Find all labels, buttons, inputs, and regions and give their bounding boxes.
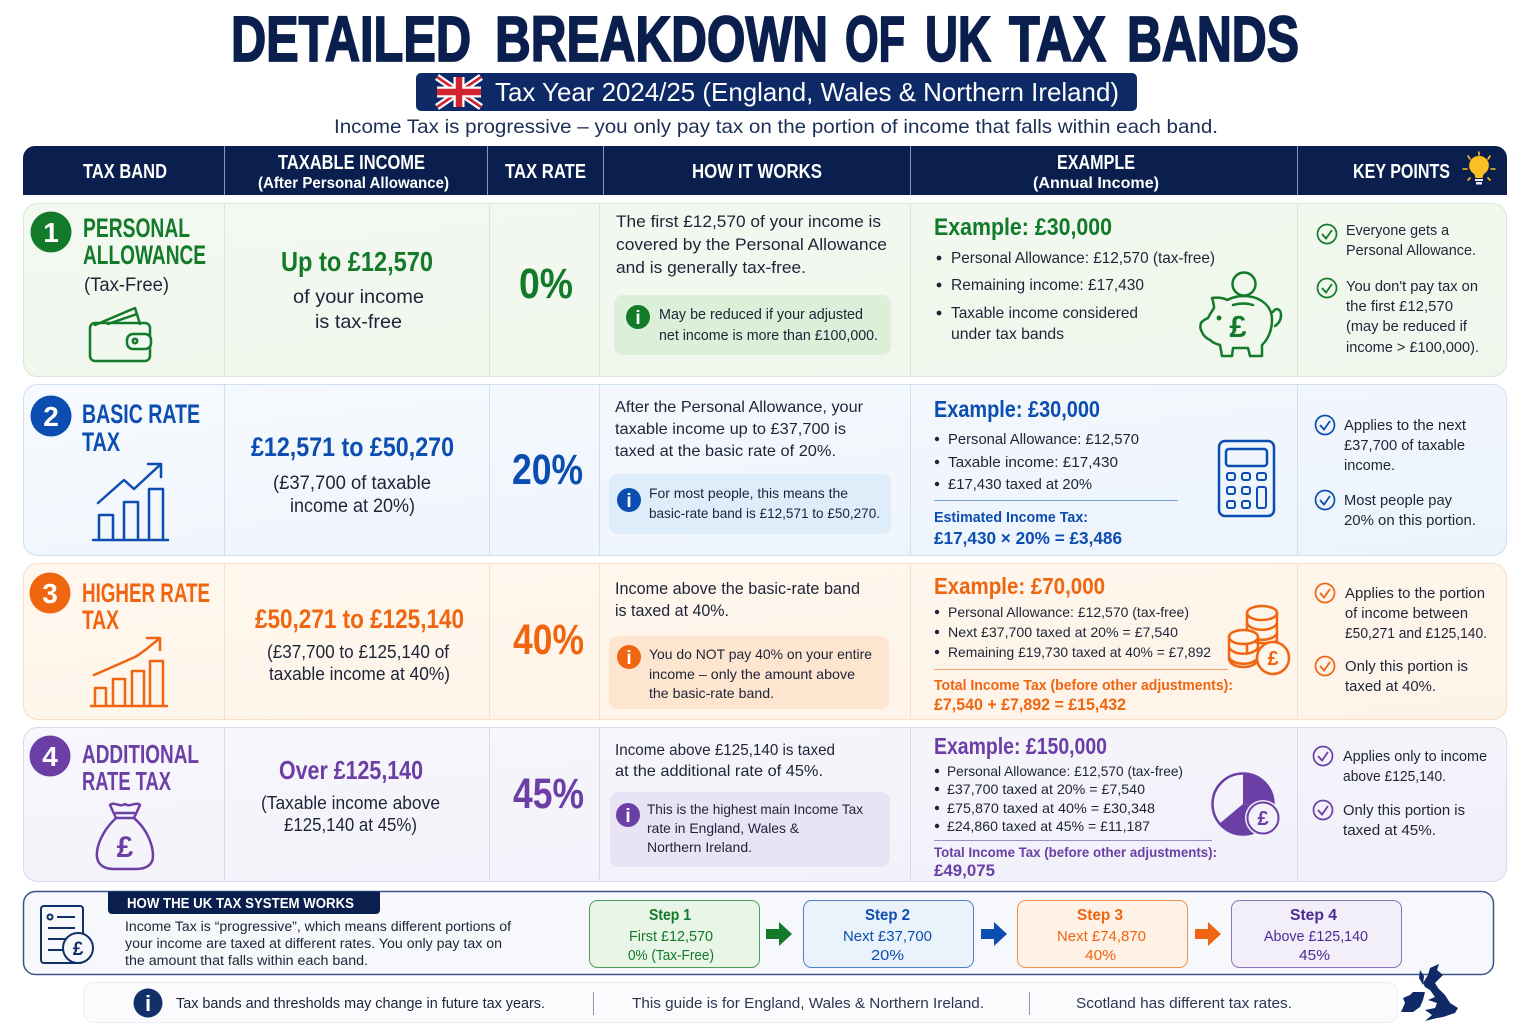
- icon: union jack flag: [437, 77, 481, 107]
- step 3: Next £74,870: [1057, 929, 1146, 945]
- example: Example: £70,000: [934, 573, 1105, 599]
- taxable income: income at 20%): [290, 496, 415, 517]
- how it works: The first £12,570 of your income is: [616, 212, 881, 231]
- step 3: 40%: [1085, 948, 1116, 964]
- header: taxable income: (After Personal Allowance): [258, 175, 449, 192]
- example: Remaining £19,730 taxed at 40% = £7,892: [948, 644, 1211, 660]
- key points: £50,271 and £125,140.: [1345, 626, 1487, 642]
- title: BANDS: [1127, 3, 1299, 75]
- icon: wallet: [90, 308, 151, 361]
- key points: Only this portion is: [1343, 803, 1465, 819]
- example: Taxable income: £17,430: [948, 454, 1118, 471]
- note 2: This guide is for England, Wales & Northern Ireland.: [632, 996, 984, 1012]
- tax rate: 20%: [512, 446, 583, 494]
- tax rate: 40%: [513, 616, 584, 664]
- title: BREAKDOWN: [495, 3, 828, 75]
- icon: rising bar chart: [93, 464, 168, 540]
- example: Personal Allowance: £12,570 (tax-free): [948, 604, 1189, 620]
- key points: Applies to the portion: [1345, 586, 1485, 602]
- taxable income: £50,271 to £125,140: [255, 604, 464, 634]
- header: tax rate: TAX RATE: [505, 161, 586, 183]
- banner text: Tax Year 2024/25 (England, Wales & Northern Ireland): [495, 77, 1119, 107]
- callout: basic-rate band is £12,571 to £50,270.: [649, 505, 880, 521]
- key points: Only this portion is: [1345, 659, 1468, 675]
- example: Taxable income considered: [951, 305, 1138, 322]
- key points: [1314, 746, 1487, 839]
- how it works: Income above £125,140 is taxed: [615, 742, 835, 759]
- title: TAX: [1009, 3, 1106, 75]
- how it works: Income above the basic-rate band: [615, 580, 860, 598]
- example: Total Income Tax (before other adjustments):: [934, 844, 1217, 860]
- example: Personal Allowance: £12,570 (tax-free): [947, 763, 1183, 779]
- callout: i: [625, 806, 631, 827]
- step 4: Step 4: [1290, 907, 1337, 924]
- arrow: step 2 to step 3: [981, 922, 1007, 946]
- taxable income: £125,140 at 45%): [284, 815, 417, 835]
- callout: [610, 792, 890, 867]
- badge 3: 3: [42, 578, 58, 609]
- how it works: covered by the Personal Allowance: [616, 235, 887, 254]
- example: Estimated Income Tax:: [934, 510, 1088, 526]
- how it works: at the additional rate of 45%.: [615, 763, 823, 780]
- band name: [82, 399, 200, 457]
- example: £17,430 taxed at 20%: [948, 476, 1092, 493]
- callout: i: [626, 648, 632, 669]
- step 2: [804, 900, 974, 968]
- key points: You don't pay tax on: [1346, 279, 1478, 295]
- explanation text: your income are taxed at different rates. You only pay tax on: [125, 936, 502, 951]
- band name: [82, 741, 199, 796]
- header: taxable income: TAXABLE INCOME: [278, 152, 425, 174]
- subtitle banner: [416, 73, 1137, 111]
- callout: For most people, this means the: [649, 485, 848, 501]
- title: [231, 3, 1299, 75]
- header: key points: KEY POINTS: [1353, 161, 1450, 183]
- how it works: taxed at the basic rate of 20%.: [615, 443, 836, 460]
- example: [934, 214, 1215, 343]
- heading tab: HOW THE UK TAX SYSTEM WORKS: [127, 896, 354, 912]
- example: [934, 733, 1217, 880]
- footer notes: [84, 982, 1398, 1022]
- callout: [609, 636, 889, 709]
- example: £17,430 × 20% = £3,486: [934, 528, 1122, 548]
- callout: You do NOT pay 40% on your entire: [649, 646, 872, 662]
- step 2: Next £37,700: [843, 929, 932, 945]
- icon label: pound on bag: £: [117, 831, 134, 864]
- icon: tax document: [41, 906, 93, 963]
- panel: higher rate row: [24, 564, 1506, 720]
- example: [934, 573, 1233, 714]
- key points: Everyone gets a: [1346, 223, 1450, 239]
- key points: taxed at 45%.: [1343, 823, 1436, 839]
- explanation text: Income Tax is “progressive”, which means different portions of: [125, 919, 511, 934]
- band name: TAX: [82, 605, 119, 635]
- taxable income: [251, 432, 454, 517]
- key points: Applies to the next: [1344, 418, 1466, 434]
- header: example: (Annual Income): [1033, 175, 1159, 192]
- how it works: [615, 399, 864, 460]
- tax rate: 45%: [513, 770, 584, 818]
- arrow: step 3 to step 4: [1195, 922, 1221, 946]
- band name: PERSONAL: [83, 213, 190, 243]
- step 1: First £12,570: [629, 929, 713, 945]
- key points: the first £12,570: [1346, 299, 1453, 315]
- how it works: taxable income up to £37,700 is: [615, 421, 846, 438]
- callout: This is the highest main Income Tax: [647, 801, 863, 817]
- table header: [23, 146, 1507, 195]
- example: Example: £30,000: [934, 396, 1100, 422]
- taxable income: [261, 755, 440, 835]
- panel: basic rate row: [24, 384, 1506, 556]
- arrow: step 1 to step 2: [766, 922, 792, 946]
- explanation text: [125, 919, 511, 968]
- taxable income: of your income: [293, 286, 424, 308]
- icon: pie chart with pound: £: [1257, 808, 1269, 830]
- badge 2: [30, 396, 72, 436]
- step 1: 0% (Tax-Free): [628, 948, 714, 964]
- icon: coin stacks: [1229, 606, 1289, 674]
- key points: above £125,140.: [1343, 769, 1446, 785]
- badge 4: [30, 736, 70, 776]
- icon: pie chart with pound: [1212, 773, 1281, 836]
- callout: Northern Ireland.: [647, 839, 752, 855]
- key points: Personal Allowance.: [1346, 243, 1476, 259]
- icon: info: [134, 988, 162, 1018]
- how it works: [615, 742, 835, 780]
- example: £37,700 taxed at 20% = £7,540: [947, 781, 1145, 797]
- example: [934, 396, 1178, 548]
- callout: i: [635, 308, 641, 329]
- step 2: Step 2: [865, 907, 910, 924]
- note 1: Tax bands and thresholds may change in future tax years.: [176, 996, 545, 1012]
- callout: [609, 474, 891, 534]
- example: Personal Allowance: £12,570: [948, 431, 1139, 448]
- band name: HIGHER RATE: [82, 578, 210, 608]
- how it works: [616, 212, 887, 277]
- taxable income: £12,571 to £50,270: [251, 432, 454, 462]
- key points: income > £100,000).: [1346, 340, 1479, 356]
- step 3: Step 3: [1077, 907, 1123, 924]
- example: Personal Allowance: £12,570 (tax-free): [951, 250, 1215, 267]
- badge 1: [30, 212, 72, 252]
- note 3: Scotland has different tax rates.: [1076, 996, 1292, 1012]
- example: under tax bands: [951, 326, 1064, 343]
- explanation text: the amount that falls within each band.: [125, 953, 368, 968]
- step 4: Above £125,140: [1264, 929, 1368, 945]
- header: how it works: HOW IT WORKS: [692, 161, 822, 183]
- callout: rate in England, Wales &: [647, 820, 800, 836]
- band name: [83, 213, 206, 296]
- step 2: 20%: [871, 948, 904, 964]
- icon label: pound on piggy bank: £: [1229, 309, 1247, 344]
- taxable income: taxable income at 40%): [269, 664, 450, 684]
- how it works: [615, 580, 860, 620]
- callout: May be reduced if your adjusted: [659, 307, 863, 323]
- how it works: and is generally tax-free.: [616, 258, 806, 277]
- header: taxable income: [258, 152, 449, 192]
- badge 1: 1: [43, 217, 59, 248]
- key points: of income between: [1345, 606, 1468, 622]
- header: example: EXAMPLE: [1057, 152, 1135, 174]
- how it works: After the Personal Allowance, your: [615, 399, 864, 416]
- title: UK: [925, 3, 991, 75]
- icon label: pound on document: £: [73, 939, 84, 960]
- example: Remaining income: £17,430: [951, 277, 1144, 294]
- band name: ALLOWANCE: [83, 240, 206, 270]
- example: £24,860 taxed at 45% = £11,187: [947, 818, 1150, 834]
- example: £75,870 taxed at 40% = £30,348: [947, 800, 1155, 816]
- header: tax band: TAX BAND: [83, 161, 167, 183]
- band name: BASIC RATE: [82, 399, 200, 429]
- example: £49,075: [934, 862, 995, 880]
- key points: Most people pay: [1344, 493, 1453, 509]
- band name: (Tax-Free): [84, 275, 169, 296]
- callout: [614, 295, 891, 355]
- callout: the basic-rate band.: [649, 685, 774, 701]
- example: Example: £30,000: [934, 214, 1112, 241]
- band name: [82, 578, 210, 635]
- icon: piggy bank: [1200, 272, 1281, 356]
- badge 3: [30, 572, 70, 614]
- key points: income.: [1344, 458, 1395, 474]
- example: £7,540 + £7,892 = £15,432: [934, 696, 1126, 714]
- icon: light bulb: [1463, 152, 1495, 184]
- callout: i: [626, 491, 632, 512]
- tax rate: 0%: [519, 260, 573, 308]
- key points: Applies only to income: [1343, 749, 1487, 765]
- icon: money bag: [97, 804, 153, 869]
- band name: TAX: [82, 427, 120, 457]
- key points: 20% on this portion.: [1344, 513, 1476, 529]
- step 1: Step 1: [649, 907, 691, 924]
- icon: calculator: [1219, 441, 1274, 516]
- title: OF: [845, 3, 905, 75]
- band name: RATE TAX: [82, 768, 171, 796]
- panel: personal allowance row: [24, 204, 1506, 376]
- how it works: is taxed at 40%.: [615, 602, 729, 620]
- step 4: [1232, 900, 1402, 968]
- key points: [1316, 584, 1487, 695]
- taxable income: [281, 246, 433, 333]
- taxable income: (Taxable income above: [261, 793, 440, 813]
- header: example: [1033, 152, 1159, 192]
- key points: (may be reduced if: [1346, 319, 1468, 335]
- taxable income: Over £125,140: [279, 755, 423, 785]
- taxable income: Up to £12,570: [281, 246, 433, 277]
- taxable income: (£37,700 to £125,140 of: [267, 642, 450, 662]
- badge 4: 4: [42, 741, 58, 772]
- step 1: [590, 900, 760, 968]
- icon: info: i: [145, 991, 151, 1016]
- taxable income: is tax-free: [315, 311, 402, 333]
- example: Total Income Tax (before other adjustments):: [934, 678, 1233, 694]
- badge 2: 2: [43, 401, 59, 432]
- callout: net income is more than £100,000.: [659, 328, 878, 344]
- intro line: Income Tax is progressive – you only pay tax on the portion of income that falls within each band.: [334, 116, 1218, 138]
- key points: [1318, 223, 1479, 356]
- example: Example: £150,000: [934, 733, 1107, 759]
- key points: £37,700 of taxable: [1344, 438, 1465, 454]
- icon: UK map: [1401, 964, 1458, 1021]
- title: DETAILED: [231, 3, 471, 75]
- icon label: pound on coins: £: [1267, 648, 1279, 670]
- taxable income: (£37,700 of taxable: [273, 473, 431, 494]
- key points: [1316, 416, 1476, 529]
- step 4: 45%: [1299, 948, 1330, 964]
- taxable income: [255, 604, 464, 684]
- panel: how the UK tax system works: [24, 892, 1494, 974]
- band name: ADDITIONAL: [82, 741, 199, 769]
- icon: rising bar chart: [91, 638, 167, 706]
- example: Next £37,700 taxed at 20% = £7,540: [948, 624, 1178, 640]
- callout: income – only the amount above: [649, 666, 855, 682]
- panel: additional rate row: [24, 728, 1506, 882]
- key points: taxed at 40%.: [1345, 679, 1436, 695]
- heading tab: [108, 892, 380, 914]
- step 3: [1018, 900, 1188, 968]
